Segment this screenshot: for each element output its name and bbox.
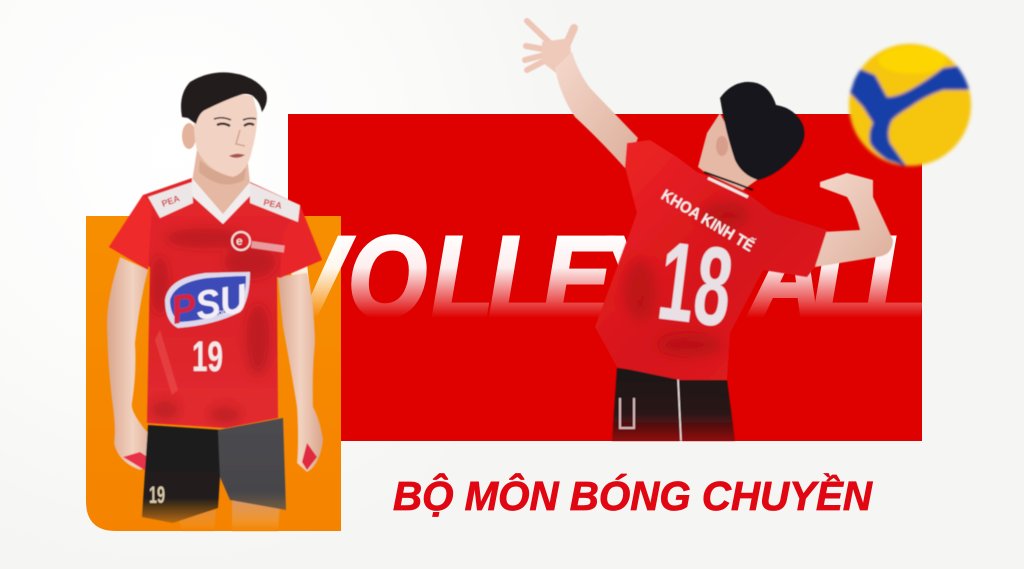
left leg: [178, 510, 216, 531]
eyes, nose and mouth: [214, 118, 256, 158]
shorts black: [142, 425, 222, 523]
raised hand: [525, 21, 574, 70]
smudge: [209, 407, 241, 423]
finger: [527, 21, 552, 45]
jersey body: [109, 178, 322, 428]
panel: orange block: [86, 216, 341, 531]
heading: VOLLEYBALL: VOLLEYBALL: [279, 213, 927, 342]
finger tape left: [123, 452, 155, 472]
left brow: [214, 118, 231, 120]
sleeve left: [109, 195, 152, 270]
ear: [716, 136, 728, 156]
mouth: [229, 154, 245, 158]
right eye: [244, 124, 254, 126]
shorts grey: [218, 418, 286, 510]
logo e: e: [236, 234, 243, 248]
ear: [182, 123, 196, 149]
logo text: PSU: [168, 276, 251, 333]
smudge: [165, 228, 245, 248]
neck: [698, 113, 757, 190]
logo blue: [170, 276, 246, 322]
finger tape right: [302, 443, 317, 470]
logo COLA: COLA: [213, 309, 232, 318]
smudge: [624, 260, 656, 320]
nose: [236, 130, 245, 146]
sponsor PEA left: PEA: [160, 193, 182, 209]
sleeve right: [280, 205, 322, 278]
smudge: [152, 255, 168, 315]
ball stripes: [850, 64, 974, 167]
jersey pattern: [151, 228, 276, 423]
ball yellow: [849, 44, 971, 166]
light streak: [155, 330, 178, 395]
thumb: [566, 28, 574, 46]
neck: [192, 150, 250, 224]
neck shadow: [199, 160, 246, 184]
shorts number: 19: [149, 482, 165, 509]
smudge: [151, 401, 179, 419]
jersey: [109, 178, 322, 428]
shoulder panel left: [148, 182, 193, 218]
sponsor PEA right: PEA: [263, 197, 283, 211]
shorts: [612, 368, 735, 441]
collar: [704, 172, 753, 190]
smudge: [246, 305, 270, 375]
logo bar: [251, 241, 285, 253]
player: number 18: [525, 21, 893, 441]
collar white: [708, 178, 748, 197]
shoulder panel right: [250, 183, 300, 222]
jersey body: [595, 140, 827, 380]
collar: [192, 178, 250, 224]
hair: [720, 82, 804, 180]
logo ring: [232, 232, 250, 250]
smudge: [224, 246, 276, 278]
ball top highlight: [878, 46, 946, 74]
finger: [526, 46, 548, 50]
right leg: [232, 498, 280, 531]
number 18: 18: [652, 218, 739, 351]
right arm: [278, 273, 323, 472]
smudge: [701, 201, 749, 229]
name print: KHOA KINH TẾ: [658, 185, 758, 256]
shorts mark: [620, 398, 634, 428]
shorts stripe: [678, 378, 681, 441]
finger: [525, 54, 548, 60]
icon: volleyball: [849, 44, 974, 167]
right brow: [243, 118, 256, 120]
jersey number 19: 19: [192, 333, 223, 381]
hair: [181, 72, 267, 124]
palm: [542, 38, 572, 73]
left eye: [217, 124, 230, 126]
PSU logo: [165, 272, 251, 333]
left arm: [107, 257, 158, 470]
raised arm: [555, 52, 638, 168]
face: [194, 92, 257, 177]
finger: [527, 58, 550, 70]
sponsor logo E: [232, 232, 285, 253]
smudge: [658, 333, 722, 357]
jersey pattern: [624, 201, 749, 357]
player: number 19: [107, 72, 323, 531]
jersey: [595, 140, 827, 380]
logo swoosh: [165, 272, 250, 328]
title: BỘ MÔN BÓNG CHUYỀN: [393, 473, 873, 519]
blue panels: [850, 64, 974, 167]
panel: red block: [288, 114, 922, 441]
right arm: [815, 173, 893, 267]
